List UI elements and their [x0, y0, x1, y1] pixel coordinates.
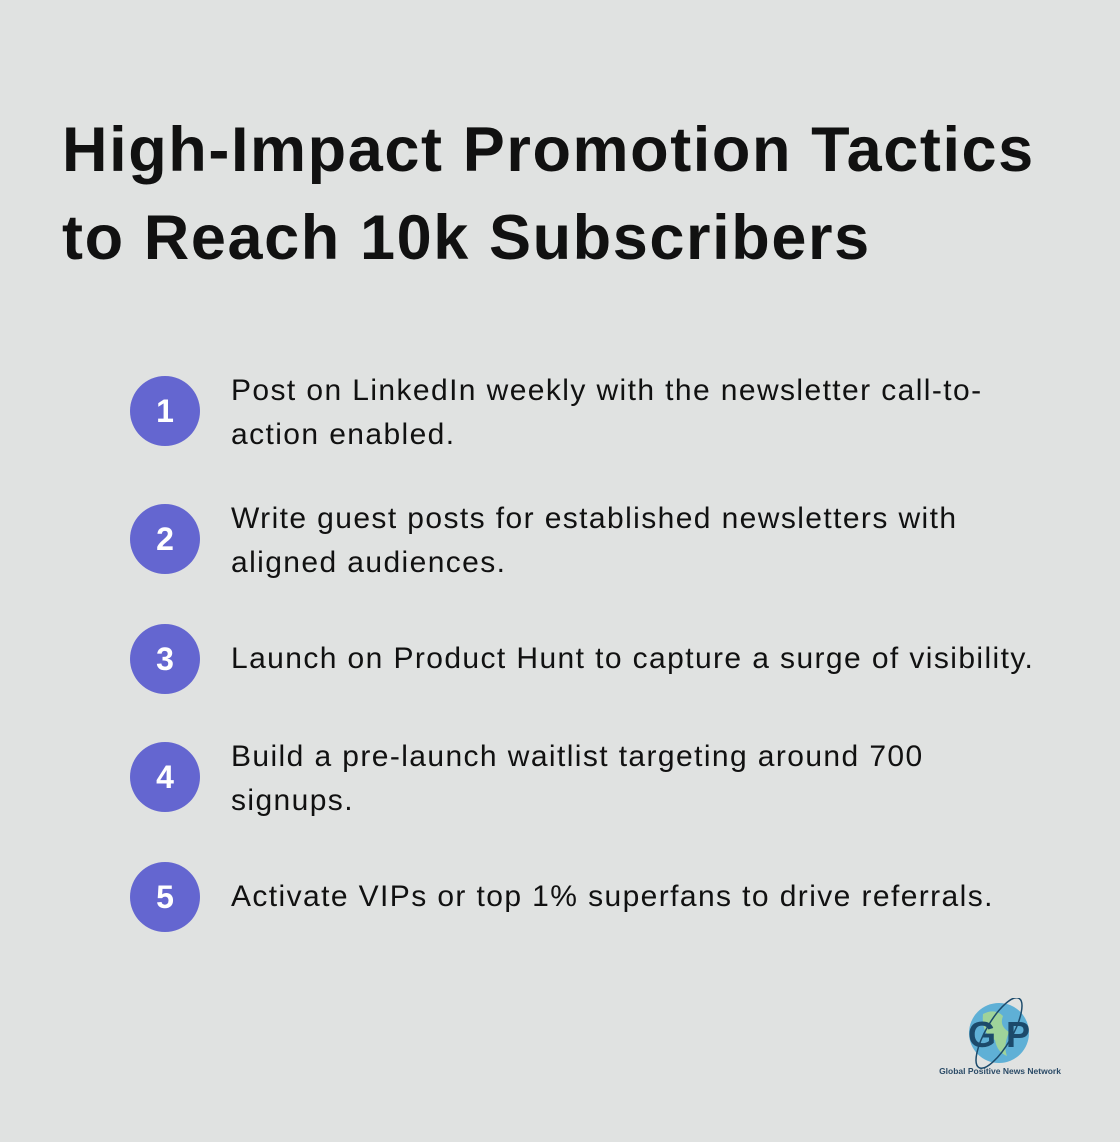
- item 3: [130, 624, 1034, 694]
- text 1: action enabled.: [231, 418, 456, 451]
- number 1: [130, 376, 200, 446]
- logo text: Global Positive News Network: [939, 1066, 1061, 1076]
- text 2: Write guest posts for established newsletters with: [231, 502, 957, 535]
- number 4: 4: [156, 759, 174, 795]
- text 2: [231, 502, 957, 579]
- number 3: [130, 624, 200, 694]
- number 2: 2: [156, 521, 174, 557]
- text 4: [231, 740, 924, 817]
- text 4: Build a pre-launch waitlist targeting around 700: [231, 740, 924, 773]
- item 5: [130, 862, 994, 932]
- number 4: [130, 742, 200, 812]
- item 4: [130, 740, 924, 817]
- text 1: Post on LinkedIn weekly with the newsletter call-to-: [231, 374, 982, 407]
- number 2: [130, 504, 200, 574]
- number 1: 1: [156, 393, 174, 429]
- logo: [939, 998, 1061, 1076]
- text 5: Activate VIPs or top 1% superfans to drive referrals.: [231, 880, 994, 913]
- item 2: [130, 502, 957, 579]
- text 4: signups.: [231, 784, 354, 817]
- number 5: [130, 862, 200, 932]
- title: to Reach 10k Subscribers: [62, 203, 871, 273]
- text 1: [231, 374, 982, 451]
- title: High-Impact Promotion Tactics: [62, 115, 1035, 185]
- text 2: aligned audiences.: [231, 546, 506, 579]
- item 1: [130, 374, 982, 451]
- number 5: 5: [156, 879, 174, 915]
- number 3: 3: [156, 641, 174, 677]
- text 3: Launch on Product Hunt to capture a surge of visibility.: [231, 642, 1034, 675]
- title: [62, 115, 1035, 273]
- icon: globe: G P: [968, 1014, 1030, 1055]
